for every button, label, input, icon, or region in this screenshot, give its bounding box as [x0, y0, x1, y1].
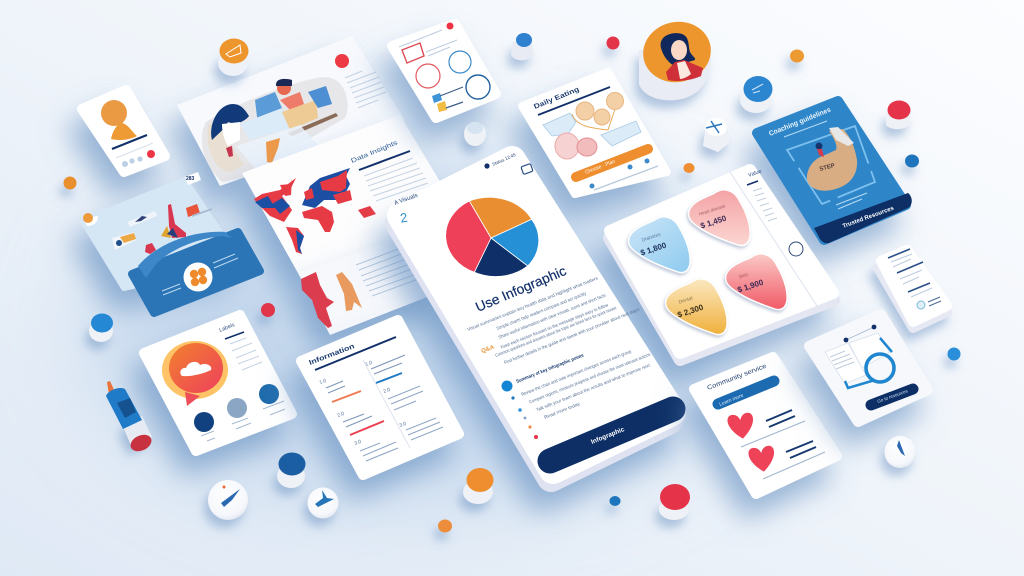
right column: 3.0	[399, 421, 407, 429]
action dots	[122, 150, 155, 167]
rule	[315, 337, 396, 370]
text lines: top	[399, 30, 457, 56]
pill: red button	[886, 100, 911, 129]
background glow	[90, 160, 750, 500]
pill: orange left	[64, 176, 76, 190]
connector dots	[844, 325, 876, 342]
block depth	[878, 254, 947, 328]
icon: cloud	[180, 362, 211, 376]
chart: navy circle	[466, 75, 490, 99]
notes icon	[917, 301, 925, 309]
avatar	[101, 100, 137, 140]
chip: luggage	[112, 232, 136, 250]
badge: orange	[83, 213, 98, 226]
status text: Status 12:45	[491, 152, 517, 167]
sidebar lines	[753, 188, 777, 221]
shield: blue	[629, 217, 690, 273]
white cloth	[829, 127, 854, 146]
rule: map	[359, 151, 410, 170]
pill: blue tiny bottom	[610, 496, 620, 506]
panel: blue footer	[132, 232, 260, 313]
pill: blue left	[89, 314, 113, 342]
card: light blue background	[83, 180, 240, 288]
shield: red	[726, 254, 787, 310]
divider: top	[741, 421, 805, 447]
pill: white ball with bird	[308, 488, 338, 518]
small figure	[816, 142, 824, 157]
shield: yellow	[666, 279, 727, 335]
puck body	[639, 50, 711, 100]
pill: orange tiny bottom	[438, 520, 452, 532]
shield: red: $ 1,900	[736, 278, 765, 295]
sheet: regional map	[298, 232, 445, 335]
bars: legend	[432, 87, 463, 112]
button	[550, 409, 673, 461]
shield: yellow: $ 2,300	[676, 303, 705, 320]
shield: red: Skin	[738, 272, 749, 281]
sidebar rule	[747, 181, 758, 185]
shield: blue: $ 1,800	[639, 241, 668, 258]
pill: red small top	[606, 36, 620, 50]
heading: Information	[308, 343, 356, 367]
list text	[520, 343, 660, 424]
pill: white ball with plane	[208, 480, 248, 520]
pill: red left	[261, 303, 275, 317]
captions	[201, 401, 285, 441]
icon: red gate	[186, 204, 212, 217]
icon: grey circle	[227, 398, 247, 418]
blue bar	[718, 381, 774, 404]
panel: speech bubble card	[144, 315, 292, 451]
icon: list badge	[502, 380, 512, 392]
notes text	[928, 297, 941, 306]
phone depth	[399, 167, 670, 478]
text block: notes: Find further details in the guide and speak with your provider about next steps	[503, 307, 641, 365]
illustration: people at a desk	[202, 77, 348, 182]
panel: profile card	[82, 90, 165, 172]
heading: map: Data Insights	[350, 139, 399, 165]
left column: 2.0	[337, 411, 345, 419]
shield: pink: $ 1,450	[699, 214, 728, 231]
paper	[825, 343, 866, 384]
label: Q&A: Q&A	[481, 344, 496, 355]
connector	[572, 106, 616, 130]
pill: white with blue cross	[703, 118, 730, 152]
text lines: regional sheet	[356, 246, 424, 296]
text block: intro: Visual summaries explain key health data and highlight what matters	[466, 275, 599, 332]
card: shields depth	[609, 176, 834, 360]
sheet: illustration	[177, 36, 405, 186]
card: research background	[392, 24, 496, 118]
lines under frame	[836, 193, 867, 209]
tube window	[117, 398, 136, 418]
tower and travelers	[145, 204, 186, 254]
tag: score: 283	[186, 176, 195, 182]
column divider	[363, 360, 410, 448]
button label: Infographic	[590, 426, 626, 446]
card background	[694, 357, 837, 494]
flower badge	[184, 262, 212, 292]
divider	[116, 143, 153, 158]
icon: menu	[521, 164, 533, 174]
divider	[730, 172, 817, 306]
rule	[225, 332, 244, 339]
panel: statistics table card	[301, 320, 459, 475]
pill: blue tiny right	[905, 154, 919, 168]
panel: coaching blue card	[757, 101, 912, 243]
frame	[787, 126, 875, 204]
world map	[254, 168, 376, 254]
cookies	[576, 92, 624, 125]
card: food guide background	[522, 72, 667, 194]
pill: orange tiny center	[684, 163, 694, 173]
heading: Labels	[219, 322, 236, 334]
puck top	[638, 16, 716, 88]
icon: blue circle	[259, 384, 279, 404]
pill: blue button	[740, 76, 772, 113]
text block: intro	[466, 275, 611, 358]
heading: food guide: Daily Eating	[533, 86, 580, 111]
navy button	[871, 389, 913, 405]
right column: 1.0	[365, 360, 373, 368]
chart: pie	[446, 197, 539, 277]
card: shields top	[610, 170, 833, 353]
lines: top heart	[766, 410, 795, 427]
text block: intro: Keep each section focused so the message stays easy to follow	[500, 302, 610, 349]
icon: red dot	[446, 22, 454, 30]
icon: red square	[402, 43, 424, 63]
regional map	[301, 272, 334, 328]
pill: orange bottom	[463, 468, 494, 504]
pill: navy blue bottom	[277, 452, 306, 488]
right column	[365, 355, 443, 440]
button label: Go to resources	[877, 388, 909, 404]
panel: notes block	[878, 249, 947, 328]
text lines	[230, 338, 262, 370]
panel: shields card	[609, 169, 834, 360]
figure: orange dress	[336, 272, 362, 311]
pill: white drum	[464, 122, 486, 146]
text on figure: STEP	[819, 163, 836, 173]
icon: navy circle	[194, 412, 214, 432]
pill: blue tiny far right	[948, 348, 960, 360]
sidebar label: Value	[748, 169, 763, 179]
small icons row	[590, 158, 650, 188]
card background	[144, 315, 292, 451]
glass pads	[543, 113, 576, 136]
panel: food guide card	[522, 72, 667, 194]
pill: orange top-left	[218, 38, 248, 76]
divider: bottom	[763, 452, 825, 479]
name bar	[112, 135, 147, 149]
panel: research card	[392, 22, 496, 118]
tan figure	[807, 129, 857, 191]
tube red cap	[128, 432, 154, 454]
blue strip	[601, 121, 641, 146]
blue ring	[845, 338, 894, 388]
icon: number: 2	[399, 210, 409, 226]
heart: top	[727, 412, 756, 440]
list text: Review the chart and note important changes across each group	[520, 349, 633, 397]
chart: blue circle	[449, 51, 471, 73]
text lines: footer	[594, 166, 658, 190]
portrait	[661, 33, 703, 81]
heart: bottom	[748, 445, 777, 473]
text block: intro: Simple charts help readers compare and act quickly	[496, 291, 588, 331]
text lines: illustration sheet	[345, 71, 386, 108]
card: blue background	[757, 101, 906, 240]
tag: score	[185, 172, 201, 185]
tube nozzle	[107, 381, 115, 395]
bar label: Learn more	[719, 393, 745, 408]
card: profile background	[82, 90, 165, 172]
left column: 3.0	[354, 439, 362, 447]
text: footer lines	[162, 254, 238, 295]
panel: stacked sheets with illustration and world map	[177, 36, 450, 335]
list heading: Summary of key infographic points	[515, 353, 585, 385]
orange button	[576, 149, 648, 177]
panel: bridge scene card	[83, 172, 260, 313]
text lines: map	[364, 158, 428, 201]
list text: Compare regions, measure progress and choose the most relevant actions	[528, 352, 652, 404]
list icons	[511, 396, 538, 439]
panel: phone	[394, 152, 673, 478]
shield: yellow: Dental	[678, 295, 694, 306]
notes lines	[888, 249, 930, 292]
text block: notes: Common questions and answers about the topic are listed here for quick review	[494, 305, 618, 358]
navy footer band	[814, 193, 912, 243]
icon: sidebar circle	[789, 242, 803, 256]
card background	[301, 320, 459, 475]
left column	[319, 378, 398, 461]
pill: orange tiny top right	[790, 50, 804, 62]
pill: red bottom	[659, 484, 690, 520]
heading: Community service	[706, 363, 768, 392]
rule	[538, 87, 610, 115]
list text: Read more today	[543, 401, 581, 420]
heading: Use Infographic	[473, 263, 569, 315]
panel: recycle document card	[809, 314, 928, 422]
subtext	[784, 121, 827, 137]
text block: intro: Share useful information with clear visuals, icons and short facts	[498, 292, 607, 340]
pink pads	[555, 133, 597, 159]
paper text	[830, 351, 854, 369]
lines: bottom heart	[786, 441, 816, 458]
card background	[809, 314, 928, 422]
heading: blue card: Coaching guidelines	[768, 107, 832, 138]
block top	[881, 250, 947, 322]
panel: avatar puck	[638, 16, 716, 100]
right column: 2.0	[383, 387, 391, 395]
second paper	[849, 333, 890, 368]
chart: red circle	[416, 64, 440, 88]
icon: red badge	[335, 54, 349, 68]
pill: blue top	[511, 33, 533, 60]
pill: white ball right	[884, 436, 916, 468]
tube white base	[122, 416, 152, 448]
tube: glue bottle	[106, 381, 154, 454]
status dot	[484, 163, 490, 169]
phone screen	[401, 160, 672, 470]
speech bubble	[162, 341, 228, 406]
shield: pink	[689, 190, 750, 246]
shield: pink: Heart disease	[698, 203, 727, 217]
text: band label: Trusted Resources	[842, 205, 895, 230]
chip: plane	[127, 211, 157, 227]
sheet: world map	[242, 115, 450, 273]
panel: community hearts card	[694, 357, 837, 494]
arch bridge	[138, 232, 232, 278]
shield: blue: Diabetes	[641, 232, 662, 244]
label: visuals: A Visuals	[394, 193, 419, 207]
left column: 1.0	[319, 378, 327, 386]
text: button: Choose · Plan	[584, 159, 616, 176]
tube blue body	[106, 388, 142, 429]
notes sublines	[891, 254, 932, 297]
list text: Talk with your team about the results and what to improve next	[535, 362, 651, 412]
